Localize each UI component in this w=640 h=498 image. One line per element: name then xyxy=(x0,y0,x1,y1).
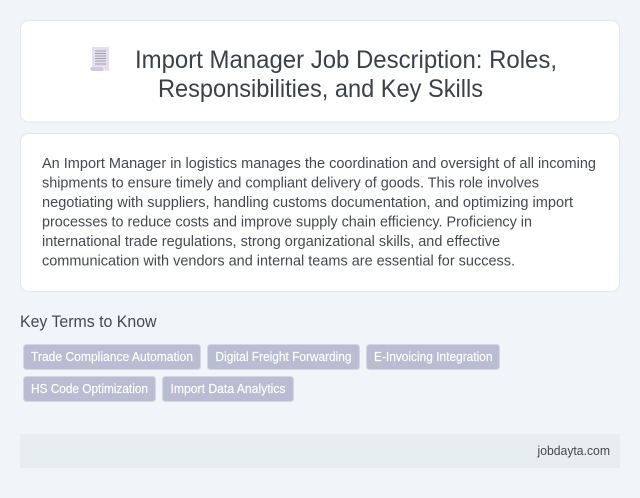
panel: description xyxy=(20,134,620,292)
description text: international trade regulations, strong organizational skills, and effective xyxy=(42,234,500,250)
tag: hs code optimization xyxy=(24,376,156,402)
panel: title xyxy=(20,20,620,122)
description text: An Import Manager in logistics manages the coordination and oversight of all incoming xyxy=(42,156,596,172)
tag: e-invoicing integration xyxy=(366,344,500,370)
heading: Responsibilities, and Key Skills xyxy=(158,75,483,103)
tag: import data analytics: Import Data Analytics xyxy=(170,382,286,396)
description text: processes to reduce costs and improve supply chain efficiency. Proficiency in xyxy=(42,214,532,230)
tag: e-invoicing integration: E-Invoicing Integration xyxy=(374,350,493,364)
icon: document xyxy=(90,47,110,71)
tag: digital freight forwarding: Digital Freight Forwarding xyxy=(216,350,352,364)
description text xyxy=(42,156,596,270)
tag: hs code optimization: HS Code Optimization xyxy=(31,382,148,396)
heading: key terms: Key Terms to Know xyxy=(20,313,157,331)
heading xyxy=(135,46,557,103)
tag: digital freight forwarding xyxy=(208,344,360,370)
footer source text: jobdayta.com xyxy=(537,444,610,458)
description text: communication with vendors and internal teams are essential for success. xyxy=(42,254,515,270)
tag: trade compliance automation: Trade Compliance Automation xyxy=(31,350,193,364)
key terms tags xyxy=(24,344,500,402)
tag: import data analytics xyxy=(162,376,294,402)
description text: negotiating with suppliers, handling customs documentation, and optimizing import xyxy=(42,195,573,211)
description text: shipments to ensure timely and compliant delivery of goods. This role involves xyxy=(42,176,539,192)
footer xyxy=(20,434,620,468)
tag: trade compliance automation xyxy=(24,344,200,370)
heading: Import Manager Job Description: Roles, xyxy=(135,46,557,74)
